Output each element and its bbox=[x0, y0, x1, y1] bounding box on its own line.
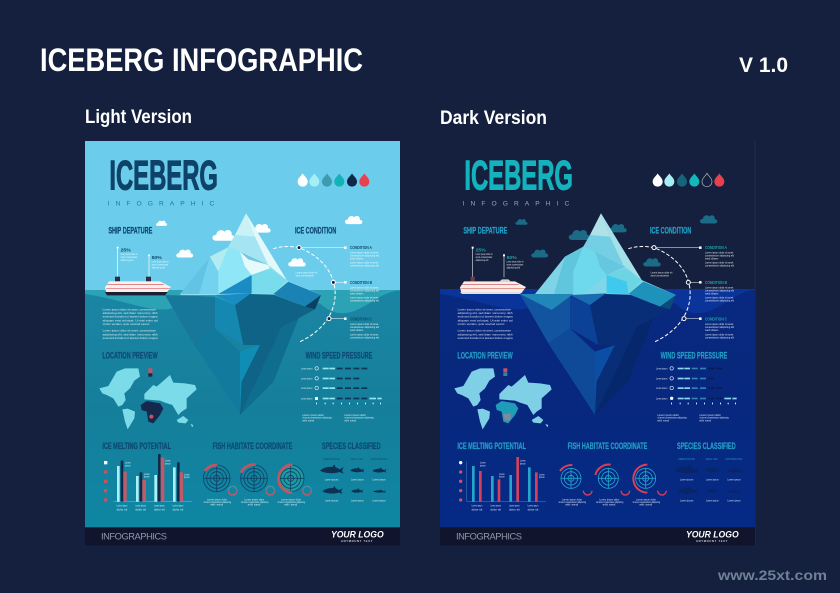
condition C: sed diam bbox=[350, 328, 364, 332]
text block: aliquam erat volutpat. Ut wisi enim ad bbox=[458, 318, 513, 322]
notes: Lorem ipsum dolor bbox=[344, 413, 366, 417]
species columns: SMALL FISH bbox=[351, 457, 363, 461]
condition B: CONDITION B bbox=[705, 280, 727, 286]
captions: elit sed bbox=[603, 503, 616, 507]
logo: YOUR LOGO bbox=[331, 529, 384, 539]
captions: Lorem ipsum dolor bbox=[636, 497, 656, 501]
captions: Lorem ipsum dolor bbox=[562, 497, 582, 501]
section: ship departure bbox=[458, 225, 526, 340]
bar labels: dolor sit bbox=[117, 508, 128, 512]
scale ticks bbox=[671, 403, 736, 404]
row labels and markers: Lorem ipsum bbox=[301, 386, 313, 390]
footer: INFOGRAPHICS bbox=[101, 531, 167, 541]
species columns bbox=[323, 457, 388, 461]
condition A: Lorem ipsum dolor sit amet bbox=[350, 261, 378, 265]
row labels and markers: Lorem ipsum bbox=[656, 376, 668, 380]
heading: species classified: SPECIES CLASSIFIED bbox=[322, 441, 381, 451]
condition A bbox=[350, 245, 379, 268]
captions bbox=[204, 497, 305, 507]
fish captions: Lorem ipsum bbox=[325, 499, 339, 503]
section: wind speed pressure bbox=[656, 350, 737, 423]
captions: elit sed bbox=[284, 503, 297, 507]
text block: Lorem ipsum dolor sit amet, consectetuer bbox=[103, 307, 156, 311]
bar labels: ipsum bbox=[184, 475, 190, 479]
condition B: CONDITION B bbox=[350, 280, 372, 286]
section: ice melting potential bbox=[457, 441, 546, 512]
text block: adipiscing elit, sed diam nonummy nibh bbox=[458, 332, 513, 336]
condition A: Lorem ipsum dolor sit amet bbox=[350, 250, 378, 254]
heading: ice condition: ICE CONDITION bbox=[295, 225, 336, 235]
scale ticks bbox=[316, 403, 381, 404]
heading: location preview: LOCATION PREVIEW bbox=[457, 350, 513, 360]
dark version heading: Dark Version bbox=[440, 108, 547, 129]
text block: euismod tincidunt ut laoreet dolore magna bbox=[458, 315, 513, 319]
notes: Lorem ipsum dolor bbox=[657, 413, 679, 417]
row labels and markers bbox=[656, 366, 673, 401]
dark segments bbox=[337, 368, 367, 399]
section: species classified bbox=[320, 441, 388, 503]
condition B: consectetuer adipiscing elit bbox=[705, 288, 734, 292]
watermark: www.25xt.com bbox=[717, 567, 827, 583]
row labels and markers bbox=[301, 366, 318, 401]
condition B: consectetuer adipiscing elit bbox=[705, 299, 734, 303]
condition C: Lorem ipsum dolor sit amet bbox=[705, 322, 733, 326]
text block: Lorem ipsum dolor sit amet, consectetuer bbox=[458, 307, 511, 311]
bar labels: ipsum bbox=[480, 463, 486, 467]
radar rings bbox=[561, 468, 656, 488]
fish captions: Lorem ipsum bbox=[351, 477, 364, 481]
section: species classified bbox=[675, 441, 743, 503]
callout: 50%: 50% bbox=[152, 255, 162, 261]
southern Africa highlight bbox=[503, 413, 511, 421]
bar labels: ipsum bbox=[539, 475, 545, 479]
footer: INFOGRAPHICS bbox=[456, 531, 522, 541]
notes bbox=[657, 413, 729, 423]
text block: adipiscing elit, sed diam nonummy nibh bbox=[458, 311, 513, 315]
notes: elit sed bbox=[344, 419, 356, 423]
heading: ICEBERG: ICEBERG bbox=[109, 153, 218, 199]
text block: euismod tincidunt ut laoreet dolore magna bbox=[103, 336, 158, 340]
legend dots bbox=[459, 461, 462, 502]
condition B: sed diam bbox=[350, 291, 364, 295]
callout: 25%: adipiscing elit bbox=[476, 258, 488, 262]
row labels and markers: Lorem ipsum bbox=[656, 386, 668, 390]
species columns bbox=[678, 457, 743, 461]
bar labels: Lorem bbox=[125, 461, 131, 465]
fish icons bbox=[320, 464, 387, 494]
heading: fish habitate coordinate: FISH HABITATE COORDINATE bbox=[568, 441, 647, 451]
condition C: sed diam bbox=[705, 328, 719, 332]
highlighted Africa bbox=[496, 401, 518, 423]
colour drops bbox=[298, 173, 369, 187]
condition B: Lorem ipsum dolor sit amet bbox=[350, 296, 378, 300]
fish captions: Lorem ipsum bbox=[680, 499, 694, 503]
section: location preview bbox=[454, 350, 552, 429]
panel: light version poster bbox=[85, 141, 400, 545]
captions: Lorem ipsum dolor bbox=[244, 497, 264, 501]
section: ship departure bbox=[103, 225, 171, 340]
callout: 25%: 25% bbox=[121, 247, 131, 253]
caption under cloud bbox=[651, 270, 672, 278]
bar labels: Lorem ipsum bbox=[117, 504, 128, 508]
fish captions: Lorem ipsum bbox=[706, 477, 719, 481]
bar labels: dolor sit bbox=[154, 508, 165, 512]
world map bbox=[99, 368, 197, 429]
subheading: infographic: INFOGRAPHIC bbox=[463, 201, 570, 208]
condition A: CONDITION A bbox=[350, 245, 372, 251]
poster sky bbox=[85, 141, 400, 290]
bar labels: Lorem ipsum bbox=[509, 504, 520, 508]
nodes bbox=[652, 246, 690, 321]
mid segments bbox=[692, 368, 706, 399]
bar labels bbox=[472, 459, 545, 512]
condition C: consectetuer adipiscing elit bbox=[350, 325, 379, 329]
map pin bbox=[503, 368, 507, 376]
captions: sit amet consectetuer adipiscing bbox=[596, 500, 624, 504]
poster edge line bbox=[754, 140, 756, 545]
captions: elit sed bbox=[248, 503, 261, 507]
iceberg above water bbox=[535, 213, 676, 309]
bar labels: Lorem ipsum bbox=[472, 504, 483, 508]
panel: dark version poster bbox=[440, 140, 755, 545]
captions bbox=[559, 497, 660, 507]
condition C: consectetuer adipiscing elit bbox=[705, 335, 734, 339]
callout: 25%: amet consectetuer bbox=[121, 255, 137, 259]
fish captions: Lorem ipsum bbox=[372, 499, 386, 503]
condition A: sed diam bbox=[705, 256, 719, 260]
callout: 50%: amet consectetuer bbox=[507, 263, 523, 267]
fish captions: Lorem ipsum bbox=[372, 477, 386, 481]
condition C: Lorem ipsum dolor sit amet bbox=[350, 332, 378, 336]
captions: elit sed bbox=[210, 503, 223, 507]
bar labels: Lorem bbox=[539, 472, 545, 476]
bar labels: Lorem ipsum bbox=[490, 504, 501, 508]
callout: 25%: adipiscing elit bbox=[121, 258, 133, 262]
captions: elit sed bbox=[565, 503, 578, 507]
captions: Lorem ipsum dolor bbox=[599, 497, 619, 501]
callout: 25% bbox=[472, 247, 492, 277]
condition C: Lorem ipsum dolor sit amet bbox=[350, 322, 378, 326]
world map bbox=[454, 368, 552, 429]
species columns: NON RESTING bbox=[726, 457, 743, 461]
fish captions bbox=[325, 477, 386, 503]
callout: 25%: Lorem ipsum dolor sit bbox=[121, 252, 137, 256]
clouds bbox=[515, 215, 717, 266]
iceberg under water bbox=[520, 293, 670, 415]
bar labels: ipsum bbox=[499, 474, 505, 478]
heading: ice melting potential: ICE MELTING POTENTIAL bbox=[457, 441, 526, 451]
light version heading: Light Version bbox=[85, 107, 192, 128]
condition B: Lorem ipsum dolor sit amet bbox=[705, 285, 733, 289]
fish captions bbox=[680, 477, 741, 503]
notes: sit amet consectetuer adipiscing bbox=[344, 416, 374, 420]
radar rings bbox=[203, 465, 304, 492]
notes: sit amet consectetuer adipiscing bbox=[699, 416, 729, 420]
condition A: Lorem ipsum dolor sit amet bbox=[705, 250, 733, 254]
caption under cloud: Lorem ipsum dolor sit bbox=[651, 270, 672, 274]
heading: ICEBERG: ICEBERG bbox=[464, 153, 573, 199]
condition C: Lorem ipsum dolor sit amet bbox=[705, 332, 733, 336]
text block: adipiscing elit, sed diam nonummy nibh bbox=[103, 311, 158, 315]
iceberg under water bbox=[165, 293, 315, 415]
bar labels: ipsum bbox=[144, 474, 150, 478]
bar labels bbox=[117, 459, 190, 512]
footer: ANYMOUNT TEXT bbox=[696, 539, 728, 543]
nodes bbox=[297, 246, 335, 321]
fish captions: Lorem ipsum bbox=[727, 477, 741, 481]
captions: Lorem ipsum dolor bbox=[207, 497, 227, 501]
callout: 50%: Lorem ipsum dolor sit bbox=[152, 260, 168, 264]
light segments bbox=[678, 368, 737, 399]
section: location preview bbox=[99, 350, 197, 429]
bar labels: Lorem bbox=[184, 472, 190, 476]
heading: ship depature: SHIP DEPATURE bbox=[108, 225, 152, 235]
fish captions: Lorem ipsum bbox=[680, 477, 694, 481]
captions: Lorem ipsum dolor bbox=[281, 497, 301, 501]
bar labels: ipsum bbox=[520, 461, 526, 465]
row labels and markers: Lorem ipsum bbox=[656, 366, 668, 370]
row labels and markers: Lorem ipsum bbox=[301, 376, 313, 380]
main title: ICEBERG INFOGRAPHIC bbox=[40, 42, 363, 78]
captions: elit sed bbox=[639, 503, 652, 507]
notes bbox=[302, 413, 374, 423]
condition B bbox=[705, 280, 734, 303]
heading: ship depature: SHIP DEPATURE bbox=[463, 225, 507, 235]
light segments bbox=[323, 368, 382, 399]
poster water bbox=[85, 290, 400, 528]
text block: minim veniam, quis nostrud exerci bbox=[458, 322, 505, 326]
bar labels: Lorem ipsum bbox=[173, 504, 184, 508]
condition A: consectetuer adipiscing elit bbox=[705, 253, 734, 257]
section: ice melting potential bbox=[102, 441, 192, 512]
condition C: consectetuer adipiscing elit bbox=[705, 325, 734, 329]
dark segments bbox=[708, 368, 722, 399]
text block bbox=[103, 307, 158, 340]
fish captions: Lorem ipsum bbox=[706, 499, 719, 503]
notes: elit sed bbox=[302, 419, 314, 423]
text block: minim veniam, quis nostrud exerci bbox=[103, 322, 150, 326]
heading: wind speed pressure: WIND SPEED PRESSURE bbox=[306, 350, 372, 360]
condition C: consectetuer adipiscing elit bbox=[350, 335, 379, 339]
caption under cloud: amet consectetuer bbox=[651, 274, 669, 278]
footer bbox=[85, 527, 400, 545]
caption under cloud: Lorem ipsum dolor sit bbox=[296, 270, 317, 274]
text block: Lorem ipsum dolor sit amet, consectetuer bbox=[458, 329, 511, 333]
heading: ice melting potential: ICE MELTING POTENTIAL bbox=[102, 441, 171, 451]
row labels and markers: Lorem ipsum bbox=[301, 397, 313, 401]
heading: wind speed pressure: WIND SPEED PRESSURE bbox=[661, 350, 727, 360]
notes: Lorem ipsum dolor bbox=[302, 413, 324, 417]
bar labels: dolor sit bbox=[490, 508, 501, 512]
callout: 50%: adipiscing elit bbox=[507, 266, 520, 270]
callout: 25%: Lorem ipsum dolor sit bbox=[476, 252, 492, 256]
red arcs bbox=[205, 465, 292, 493]
fish captions: Lorem ipsum bbox=[727, 499, 741, 503]
small gauges bbox=[228, 486, 311, 495]
bar labels: Lorem bbox=[165, 459, 171, 463]
bar labels: Lorem ipsum bbox=[135, 504, 146, 508]
text block: euismod tincidunt ut laoreet dolore magna bbox=[103, 315, 158, 319]
species columns: PREDATOR FISH bbox=[678, 457, 695, 461]
fish icons bbox=[675, 464, 742, 494]
condition B: sed diam bbox=[705, 291, 719, 295]
subheading: infographic: INFOGRAPHIC bbox=[108, 201, 215, 208]
text block: euismod tincidunt ut laoreet dolore magna bbox=[458, 336, 513, 340]
bar labels: Lorem ipsum bbox=[528, 504, 539, 508]
notes: Lorem ipsum dolor bbox=[699, 413, 721, 417]
logo: YOUR LOGO bbox=[686, 529, 739, 539]
callout: 25%: 25% bbox=[476, 247, 486, 253]
section: fish habitat coordinate bbox=[203, 441, 311, 507]
bar labels: dolor sit bbox=[173, 508, 184, 512]
bar labels: Lorem ipsum bbox=[154, 504, 165, 508]
condition B: Lorem ipsum dolor sit amet bbox=[705, 296, 733, 300]
icon: cruise ship bbox=[105, 277, 171, 295]
section: ice condition bbox=[628, 225, 734, 342]
bar labels: Lorem bbox=[480, 461, 486, 465]
section: fish habitat coordinate bbox=[559, 441, 666, 507]
text block bbox=[458, 307, 513, 340]
captions: sit amet consectetuer adipiscing bbox=[204, 500, 231, 504]
row labels and markers: Lorem ipsum bbox=[656, 397, 668, 401]
icon: cruise ship bbox=[460, 277, 526, 294]
footer: ANYMOUNT TEXT bbox=[341, 539, 373, 543]
legend dots bbox=[104, 461, 107, 502]
dashed arc bbox=[628, 247, 690, 342]
row labels and markers: Lorem ipsum bbox=[301, 366, 313, 370]
notes: elit sed bbox=[699, 419, 711, 423]
condition C bbox=[705, 317, 734, 339]
callout: 50%: adipiscing elit bbox=[152, 266, 165, 270]
bar labels: dolor sit bbox=[528, 508, 539, 512]
text block: aliquam erat volutpat. Ut wisi enim ad bbox=[103, 318, 158, 322]
highlighted Africa bbox=[141, 401, 163, 423]
bar labels: ipsum bbox=[125, 463, 131, 467]
text block: adipiscing elit, sed diam nonummy nibh bbox=[103, 332, 158, 336]
condition B bbox=[350, 280, 379, 303]
condition A bbox=[705, 245, 734, 268]
captions: sit amet consectetuer adipiscing bbox=[633, 500, 660, 504]
clouds bbox=[156, 216, 362, 266]
callout: 25%: amet consectetuer bbox=[476, 255, 492, 259]
poster water bbox=[440, 289, 755, 528]
condition B: consectetuer adipiscing elit bbox=[350, 299, 379, 303]
condition A: consectetuer adipiscing elit bbox=[705, 264, 734, 268]
callout: 50% bbox=[148, 254, 168, 277]
colour drops bbox=[653, 173, 724, 187]
footer bbox=[440, 527, 755, 545]
notes: elit sed bbox=[657, 419, 669, 423]
condition C: CONDITION C bbox=[705, 317, 727, 323]
species columns: SMALL FISH bbox=[706, 457, 718, 461]
species columns: PREDATOR FISH bbox=[323, 457, 340, 461]
callout: 25% bbox=[117, 247, 137, 277]
dashed arc bbox=[273, 247, 335, 342]
iceberg above water bbox=[180, 213, 321, 309]
callout: 50%: Lorem ipsum dolor sit bbox=[507, 260, 523, 264]
section: wind speed pressure bbox=[301, 350, 382, 423]
map pins bbox=[148, 368, 153, 419]
captions: sit amet consectetuer adipiscing bbox=[241, 500, 269, 504]
condition A: CONDITION A bbox=[705, 245, 727, 251]
captions: sit amet consectetuer adipiscing bbox=[559, 500, 586, 504]
red arcs bbox=[560, 465, 647, 493]
bar labels: dolor sit bbox=[472, 508, 483, 512]
bar labels: Lorem bbox=[499, 472, 505, 476]
heading: location preview: LOCATION PREVIEW bbox=[102, 350, 158, 360]
heading: ice condition: ICE CONDITION bbox=[650, 225, 691, 235]
heading: species classified: SPECIES CLASSIFIED bbox=[677, 441, 736, 451]
small gauges bbox=[583, 491, 666, 495]
condition A: consectetuer adipiscing elit bbox=[350, 264, 379, 268]
text block: Lorem ipsum dolor sit amet, consectetuer bbox=[103, 329, 156, 333]
condition B: Lorem ipsum dolor sit amet bbox=[350, 285, 378, 289]
notes: sit amet consectetuer adipiscing bbox=[302, 416, 332, 420]
bar chart bbox=[113, 454, 192, 502]
callout: 50%: amet consectetuer bbox=[152, 263, 168, 267]
caption under cloud bbox=[296, 270, 317, 278]
heading: fish habitate coordinate: FISH HABITATE COORDINATE bbox=[213, 441, 292, 451]
captions: sit amet consectetuer adipiscing bbox=[278, 500, 305, 504]
version label: V 1.0 bbox=[739, 54, 788, 77]
bar labels: ipsum bbox=[165, 461, 171, 465]
caption under cloud: amet consectetuer bbox=[296, 274, 314, 278]
bar labels: Lorem bbox=[144, 472, 150, 476]
connector lines bbox=[299, 247, 346, 320]
fish captions: Lorem ipsum bbox=[325, 477, 339, 481]
poster sky bbox=[440, 141, 755, 290]
condition C: CONDITION C bbox=[350, 317, 372, 323]
callout: 50%: 50% bbox=[507, 255, 517, 261]
bar labels: Lorem bbox=[520, 459, 526, 463]
condition C bbox=[350, 317, 379, 339]
bar labels: dolor sit bbox=[509, 508, 520, 512]
notes: sit amet consectetuer adipiscing bbox=[657, 416, 687, 420]
bar labels: dolor sit bbox=[135, 508, 146, 512]
fish captions: Lorem ipsum bbox=[351, 499, 364, 503]
condition A: Lorem ipsum dolor sit amet bbox=[705, 261, 733, 265]
connector lines bbox=[654, 247, 701, 320]
condition A: sed diam bbox=[350, 256, 364, 260]
condition B: consectetuer adipiscing elit bbox=[350, 288, 379, 292]
bar chart bbox=[467, 457, 546, 502]
callout: 50% bbox=[503, 254, 523, 277]
species columns: NON RESTING bbox=[371, 457, 388, 461]
section: ice condition bbox=[273, 225, 379, 342]
condition A: consectetuer adipiscing elit bbox=[350, 253, 379, 257]
